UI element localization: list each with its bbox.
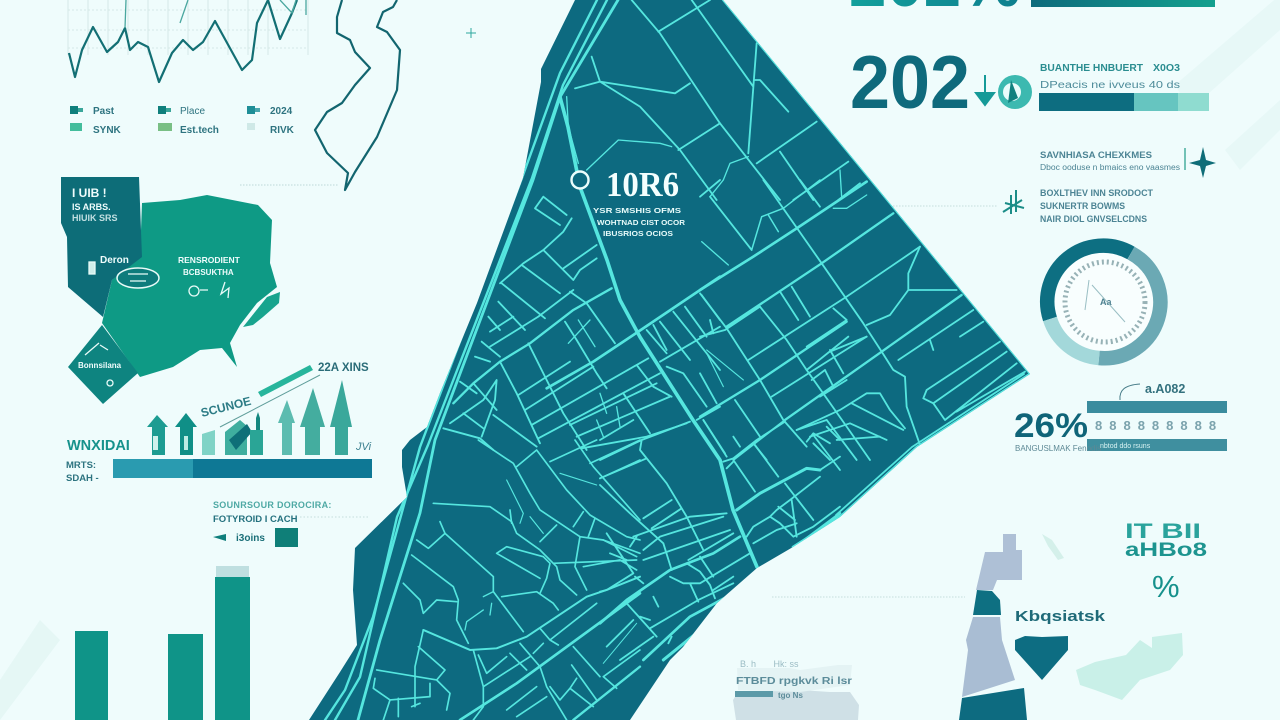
icon: small glyphs [85, 262, 229, 386]
percentage block: a.A082 [1145, 382, 1185, 396]
cloud info card [733, 659, 859, 720]
top right text: DPeacis ne ivveus 40 ds [1040, 80, 1180, 91]
panel text north-west: RENSRODIENT [178, 255, 241, 265]
cloud info card: B. h Hk: ss [740, 659, 799, 669]
map callout text: YSR SMSHIS OFMS [593, 206, 681, 215]
region map panel [61, 177, 280, 404]
icon: oval badge [117, 268, 159, 288]
note text: Dboc ooduse n bmaics eno vaasmes [1040, 163, 1180, 172]
percentage block: nbtod ddo rsuns [1100, 443, 1151, 450]
map landmass [309, 0, 1030, 720]
top year figure [849, 0, 1215, 23]
small plus marker [466, 28, 476, 38]
percentage block: 26% [1014, 407, 1088, 445]
region: dark south diamond [68, 325, 138, 404]
label: WNXIDAI [67, 438, 130, 454]
crop: west centre [443, 197, 720, 450]
top right text: BUANTHE HNBUERT [1040, 63, 1143, 74]
legend: Place [180, 106, 205, 117]
top right text [1040, 63, 1180, 91]
panel text north-west: BCBSUKTHA [183, 268, 234, 277]
region: dark north-west [61, 177, 142, 317]
progress bar [1039, 93, 1209, 111]
dotted leader bottom [772, 596, 965, 598]
note text: BOXLTHEV INN SRODOCT [1040, 188, 1153, 199]
icon: small spike [1184, 148, 1186, 170]
crop: south east [600, 420, 840, 660]
panel text north-west: IS ARBS. [72, 202, 111, 212]
top right text: X0O3 [1153, 63, 1180, 74]
icon: arrow and globe [976, 75, 1032, 109]
highways and edges [325, 0, 1030, 720]
icon: spiky glyph [1003, 190, 1024, 214]
bar label: SDAH - [66, 473, 99, 484]
bar chart [75, 566, 250, 720]
note text [1040, 150, 1180, 172]
stacked bar [113, 459, 372, 478]
strip region map [959, 534, 1027, 720]
panel text north-west: HIUIK SRS [72, 213, 118, 223]
dotted leader left [240, 184, 338, 186]
pale fragment [1042, 534, 1064, 560]
percentage block: 888888888 [1095, 418, 1223, 433]
bar chart note: FOTYROID I CACH [213, 514, 298, 525]
line chart [68, 0, 308, 82]
panel text north-west: I UIB ! [72, 186, 107, 200]
edge line north east corner [793, 374, 1030, 547]
bar chart note [213, 500, 332, 547]
donut segments [1047, 246, 1160, 358]
legend: RIVK [270, 125, 295, 136]
label: JVi [355, 441, 372, 453]
state outline map [315, 0, 400, 190]
donut chart [1047, 246, 1160, 358]
icon: heart [1015, 636, 1068, 680]
percentage block: BANGUSLMAK Fenodis [1015, 444, 1101, 453]
note text: NAIR DIOL GNVSELCDNS [1040, 214, 1147, 225]
note text: SAVNHIASA CHEXKMES [1040, 150, 1152, 161]
panel text north-west: Deron [100, 255, 129, 266]
percentage block [1014, 382, 1227, 453]
main year figure: 202 [850, 40, 970, 124]
cloud info card: FTBFD rpgkvk Ri lsr [736, 676, 852, 687]
percent block: aHBo8 [1125, 540, 1207, 561]
rising arrow [220, 375, 320, 427]
note text: SUKNERTR BOWMS [1040, 201, 1125, 212]
pale region [1076, 633, 1183, 700]
percent block: IT BII [1125, 520, 1201, 543]
label: 22A XINS [318, 362, 369, 374]
legend [70, 106, 295, 136]
map callout text: IBUSRIOS OCIOS [603, 229, 673, 238]
note text [1040, 188, 1153, 225]
map callout text: WOHTNAD CIST OCOR [597, 218, 686, 227]
map callout text [593, 206, 686, 238]
region: green main [102, 195, 277, 377]
percent block [1125, 520, 1207, 604]
label: SCUNOE [199, 394, 253, 420]
donut inner ticks [1065, 262, 1145, 342]
panel text north-west: Bonnsilana [78, 361, 122, 370]
dotted leader right [893, 205, 998, 207]
icon: sparkle [1189, 147, 1216, 178]
map callout icon [572, 172, 588, 188]
region: peninsula [243, 292, 280, 327]
legend: Past [93, 106, 115, 117]
map callout value: 10R6 [606, 165, 679, 204]
donut center label: Aa [1100, 297, 1112, 307]
crop: north [567, 0, 860, 200]
percent block: % [1152, 569, 1180, 604]
heart label: Kbqsiatsk [1015, 608, 1106, 625]
legend: SYNK [93, 125, 122, 136]
bar chart note: i3oins [236, 533, 265, 544]
panel text north-west [72, 186, 241, 370]
main street map [309, 0, 1030, 720]
skyline buildings [147, 380, 352, 455]
legend: Est.tech [180, 125, 219, 136]
bar chart note: SOUNRSOUR DOROCIRA: [213, 500, 332, 510]
crop: east centre [700, 180, 1025, 460]
legend: 2024 [270, 106, 293, 117]
street network [325, 0, 1030, 720]
crop: south west [373, 440, 640, 720]
bar label: MRTS: [66, 460, 96, 471]
skyline chart [66, 362, 372, 484]
cloud info card: tgo Ns [778, 691, 803, 700]
